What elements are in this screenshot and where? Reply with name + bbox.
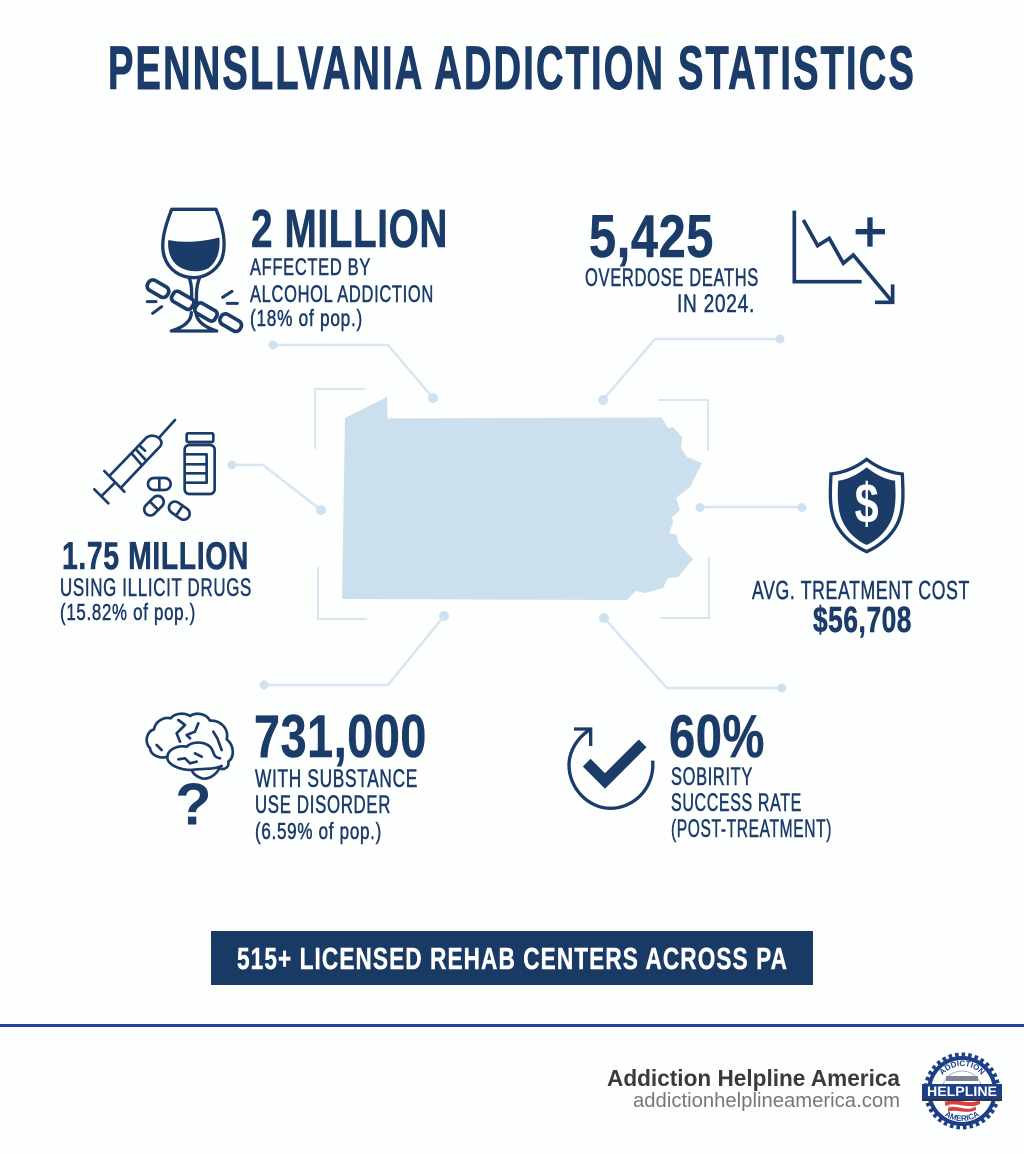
connector: sobriety statistic to map [599,613,786,692]
callout banner: 515+ LICENSED REHAB CENTERS ACROSS PA [237,941,788,976]
label: affected by alcohol addiction: AFFECTED BY [250,254,371,281]
label: use disorder: USE DISORDER [255,791,391,819]
label: using illicit drugs: USING ILLICIT DRUGS [60,574,252,602]
icon: syringe, bottle and pills [94,420,215,522]
map: Pennsylvania silhouette [342,397,702,600]
label: in 2024: IN 2024. [677,290,755,318]
map corner brackets [315,389,709,619]
label: alcohol addiction: ALCOHOL ADDICTION [250,281,434,308]
logo badge: HELPLINE [927,1084,997,1099]
logo badge: AMERICA [944,1112,980,1122]
label: post-treatment: (POST-TREATMENT) [671,815,832,843]
icon: brain with question mark [147,714,233,838]
footer divider [0,1024,1024,1027]
label: 18 percent of population: (18% of pop.) [250,305,363,331]
connector: alcohol statistic to map [268,340,438,403]
connector: treatment cost statistic to map [696,503,806,512]
panel: substance use disorder [147,703,427,844]
icon: shield with dollar sign [830,459,903,552]
icon: circular arrow with check mark [569,729,653,808]
panel: overdose deaths [585,203,893,318]
footer website: addictionhelplineamerica.com [633,1090,900,1112]
icon: declining chart with plus [794,211,893,302]
connector: illicit drugs statistic to map [228,460,326,515]
label: overdose deaths: OVERDOSE DEATHS [585,264,759,292]
panel: illicit drugs [60,420,252,625]
stat: 731,000: 731,000 [254,703,427,770]
stat: 1.75 million: 1.75 MILLION [62,535,249,578]
label: 6.59 percent of population: (6.59% of pop.) [255,818,382,844]
panel: sobriety success [569,703,832,843]
logo badge [922,1052,1002,1130]
stat: 60 percent: 60% [669,703,765,770]
connector: overdose statistic to map [598,334,784,405]
stat: 56,708 dollars: $56,708 [813,599,912,640]
panel: treatment cost [752,459,970,640]
label: 15.82 percent of population: (15.82% of pop.) [60,599,196,625]
label: success rate: SUCCESS RATE [671,789,802,817]
stat: 2 million: 2 MILLION [251,199,448,259]
connector: substance use statistic to map [260,611,449,690]
icon: brain with question mark: ? [175,771,211,838]
panel: alcohol addiction [145,199,448,333]
icon: wine glass with broken chain [145,209,243,333]
icon: shield with dollar sign: $ [855,473,879,536]
footer brand name: Addiction Helpline America [607,1065,900,1091]
logo badge: ADDICTION [940,1060,985,1075]
label: with substance: WITH SUBSTANCE [255,765,418,793]
stat: 5,425: 5,425 [589,203,714,270]
label: sobriety: SOBIRITY [671,763,753,791]
callout banner [211,931,813,985]
